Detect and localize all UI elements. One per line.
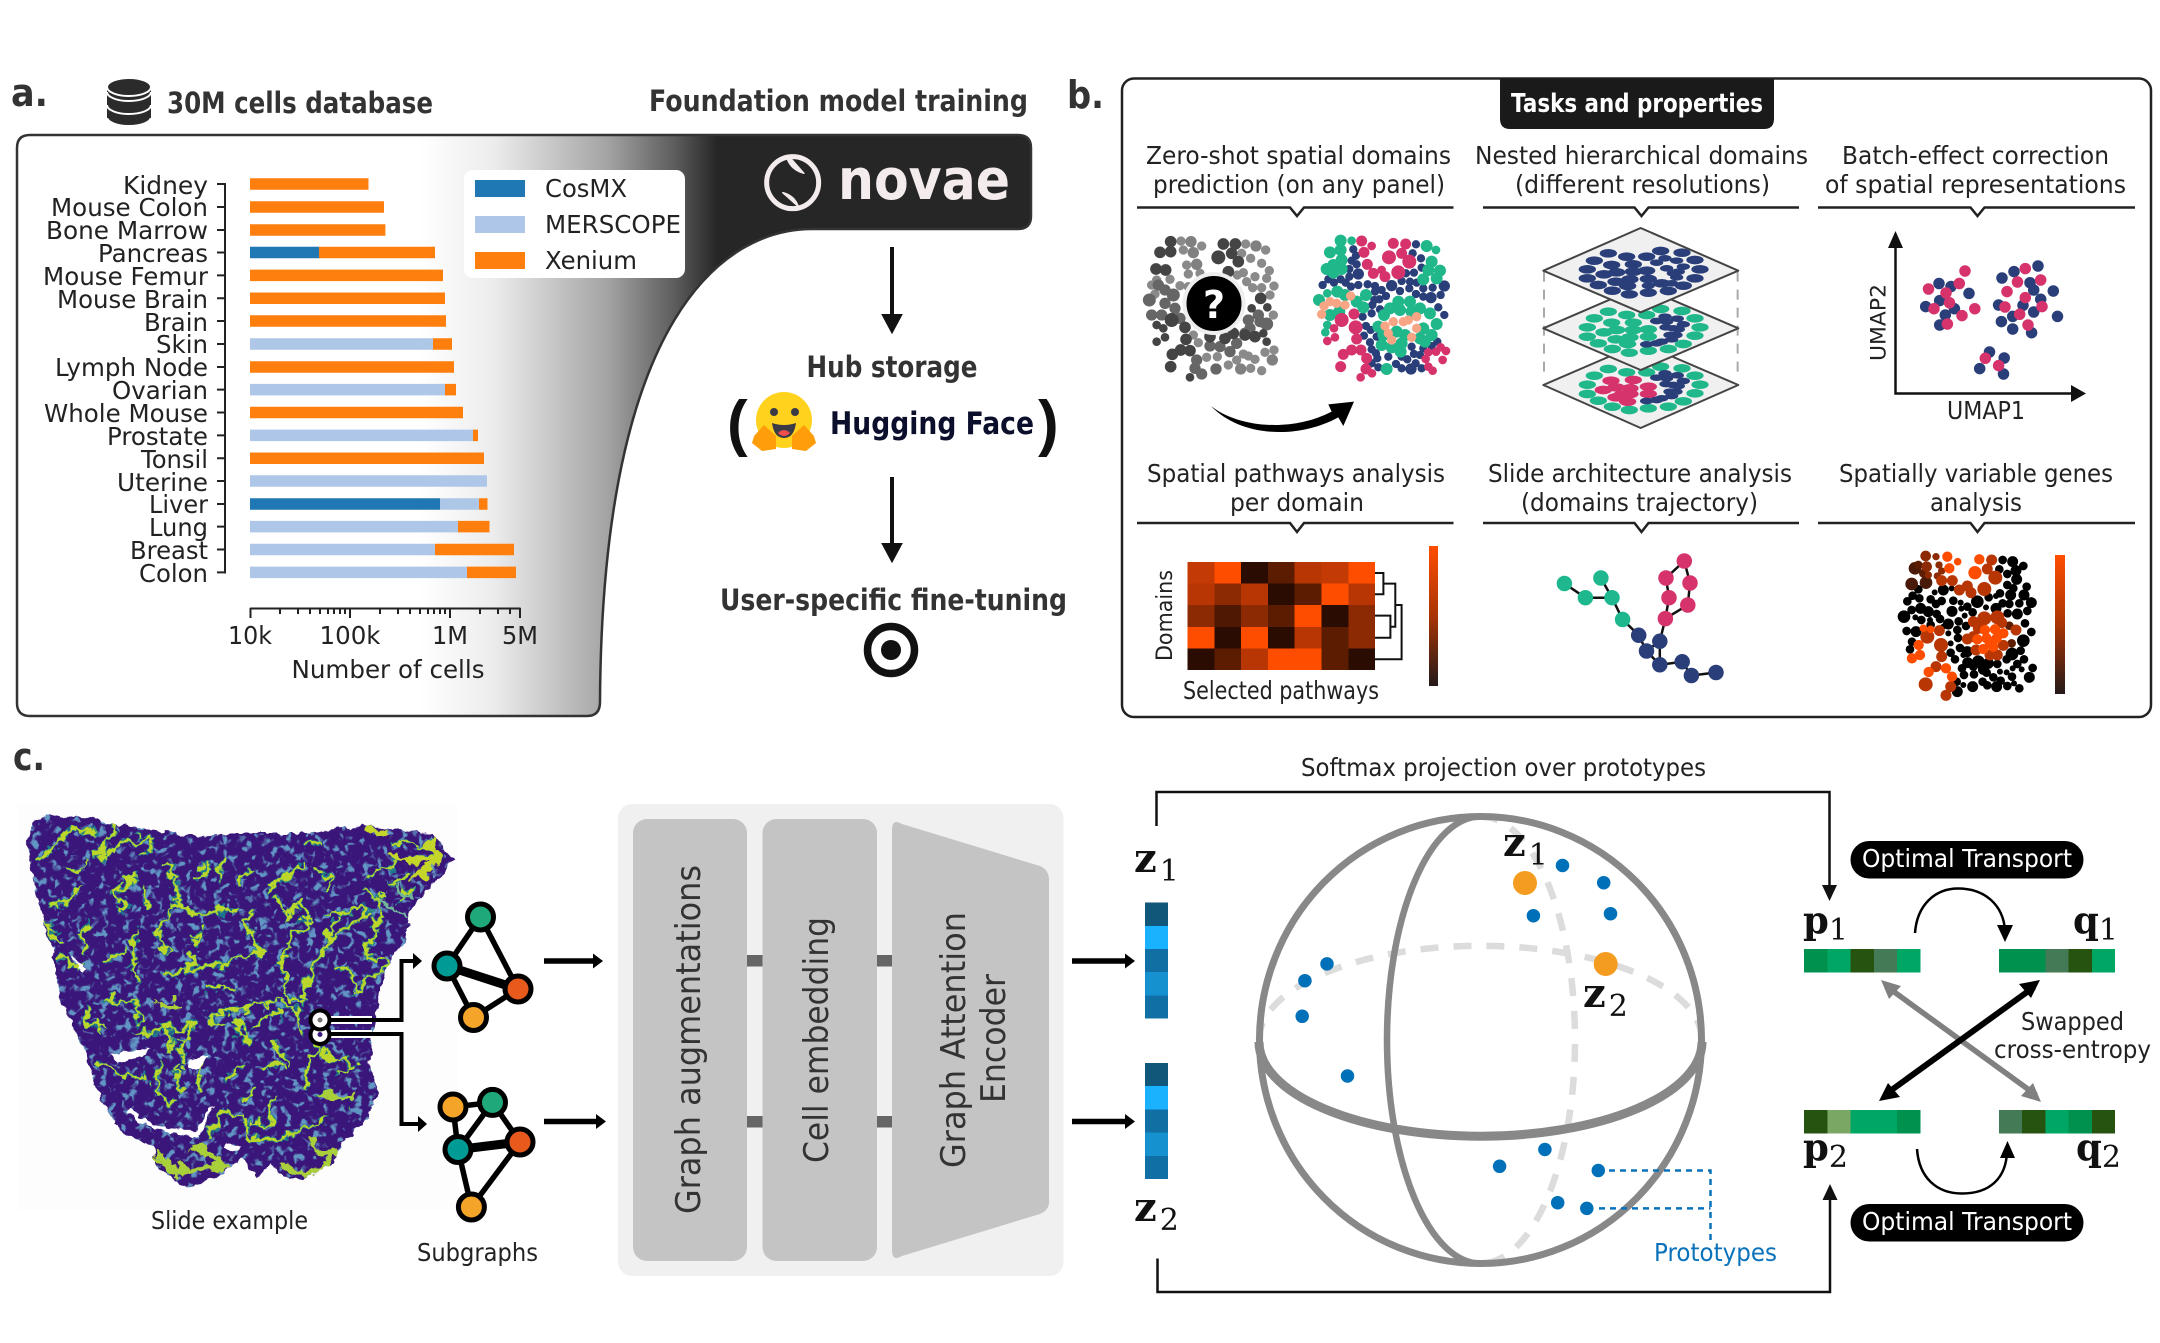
label swapped cross-entropy (1994, 1007, 2151, 1064)
tissue labels: Brain (144, 308, 208, 337)
task heading (1137, 459, 1454, 532)
block: cell embedding: Cell embedding (797, 917, 837, 1163)
domains label: Domains (1153, 570, 1178, 661)
icon: target (868, 626, 914, 674)
UMAP1 label: UMAP1 (1947, 396, 2025, 425)
curved arrow (1211, 402, 1354, 432)
label p1: p (1803, 898, 1829, 942)
task heading: Spatially variable genes (1839, 459, 2113, 488)
gene expression scatter (1904, 556, 2033, 695)
arrows: encoder to embeddings (1072, 961, 1128, 1122)
UMAP points (1926, 266, 2058, 374)
x tick labels (228, 621, 538, 650)
prototype leader lines (1599, 1170, 1710, 1241)
label z1: 1 (1160, 854, 1179, 889)
pill: optimal transport bottom: Optimal Transport (1862, 1207, 2072, 1236)
label p2: 2 (1829, 1140, 1848, 1175)
task: slide architecture (1483, 459, 1799, 676)
sphere outline (1259, 816, 1702, 1264)
task heading: Batch-effect correction (1842, 141, 2109, 170)
task heading: (domains trajectory) (1521, 488, 1758, 517)
label p2: p (1803, 1125, 1829, 1169)
label swapped cross-entropy: cross-entropy (1994, 1035, 2151, 1064)
icon: hugging face emoji (752, 392, 816, 451)
label q1: 1 (2099, 913, 2118, 948)
block: graph augmentations: Graph augmentations (669, 865, 709, 1214)
question mark badge: ? (1203, 283, 1225, 327)
block: graph attention encoder (892, 822, 1049, 1258)
softmax projection bracket top (1156, 792, 1837, 901)
x axis (250, 608, 520, 618)
connectors: slide to subgraphs (310, 953, 427, 1132)
hugging face brand: Hugging Face (830, 406, 1034, 442)
tissue labels: Colon (139, 559, 208, 588)
embedding vector z1 (1145, 903, 1168, 1019)
heading: fine-tuning: User-specific fine-tuning (720, 583, 1067, 617)
label z2: 2 (1160, 1203, 1179, 1238)
tissue labels: Bone Marrow (46, 216, 208, 245)
tissue labels: Whole Mouse (44, 399, 208, 428)
label q1: q (2073, 898, 2099, 942)
block: graph augmentations (633, 819, 747, 1261)
heading: foundation model: Foundation model training (649, 84, 1028, 118)
UMAP2 label: UMAP2 (1866, 284, 1890, 361)
task heading: (different resolutions) (1515, 170, 1770, 199)
tissue labels: Tonsil (140, 445, 208, 474)
sphere (1259, 816, 1710, 1264)
curved arrow top (1915, 888, 2013, 942)
novae logo: novae (838, 148, 1010, 213)
block connectors (747, 955, 892, 1128)
label z2: z (1134, 1184, 1157, 1231)
prototype points (1302, 866, 1610, 1208)
panel c label: c. (13, 735, 45, 779)
embedding vector z2 (1145, 1063, 1168, 1179)
label z1: z (1134, 835, 1157, 882)
y axis (217, 183, 225, 574)
hugging face brand: ) (1038, 389, 1059, 458)
softmax projection bracket bottom (1158, 1184, 1838, 1292)
task: nested domains (1475, 141, 1808, 428)
bottom layer (1543, 343, 1738, 428)
tissue labels: Pancreas (98, 239, 208, 268)
x tick labels: 5M (502, 621, 538, 650)
tissue labels: Prostate (107, 422, 208, 451)
panel b: title tab: Tasks and properties (1511, 89, 1763, 119)
x axis title: Number of cells (292, 655, 484, 684)
gray cell scatter (1149, 241, 1274, 377)
question mark badge (1184, 274, 1244, 333)
embedded points (1525, 883, 1606, 964)
tissue labels: Skin (156, 330, 208, 359)
black arrow (1879, 980, 2040, 1101)
tissue labels: Breast (130, 536, 208, 565)
colored domain scatter (1319, 241, 1446, 377)
tissue labels: Mouse Brain (57, 285, 208, 314)
label q2: 2 (2102, 1140, 2121, 1175)
subgraph 2 (440, 1089, 533, 1220)
x tick labels: 100k (320, 621, 381, 650)
panel b: title tab (1500, 79, 1774, 129)
task: zero-shot domains (1137, 141, 1454, 432)
task heading (1483, 459, 1799, 532)
curved arrow bottom (1917, 1141, 2015, 1194)
caption: slide example: Slide example (151, 1206, 308, 1235)
tissue labels (43, 171, 209, 588)
colorbar (1429, 546, 1438, 686)
task heading (1818, 459, 2135, 532)
panel a: gradient background (17, 135, 1031, 716)
dendrogram (1375, 573, 1402, 659)
legend: Xenium (545, 246, 637, 275)
tissue labels: Mouse Colon (51, 193, 208, 222)
prototype bar p1 (1804, 949, 1920, 972)
tissue labels: Ovarian (112, 376, 208, 405)
prototype bar q1 (1999, 949, 2115, 972)
tissue labels: Uterine (117, 468, 208, 497)
hugging face brand (727, 389, 1059, 458)
legend: CosMX (545, 174, 627, 203)
label swapped cross-entropy: Swapped (2021, 1007, 2124, 1036)
sphere label z1: z (1503, 819, 1526, 866)
label p1: 1 (1829, 913, 1848, 948)
arrow: hub to fine-tuning (884, 477, 900, 559)
heatmap (1188, 562, 1375, 670)
heading: softmax: Softmax projection over prototypes (1301, 753, 1706, 782)
task heading: Nested hierarchical domains (1475, 141, 1808, 170)
arrowheads: subgraphs to encoder (593, 954, 606, 1129)
legend: MERSCOPE (545, 210, 681, 239)
top layer (1543, 228, 1738, 312)
colorbar (2055, 555, 2065, 694)
x tick labels: 10k (228, 621, 272, 650)
panel b: frame (1122, 78, 2151, 717)
pathways label: Selected pathways (1183, 676, 1379, 705)
task heading: of spatial representations (1825, 170, 2126, 199)
bar chart: cells per tissue (43, 171, 538, 684)
icon: database (107, 78, 151, 126)
encoder module (618, 804, 1064, 1276)
task heading: per domain (1230, 488, 1364, 517)
trajectory graph (1564, 561, 1716, 676)
tissue labels: Liver (149, 490, 209, 519)
task heading (1818, 141, 2135, 216)
task: spatially variable genes (1818, 459, 2135, 695)
tissue labels: Lung (149, 513, 208, 542)
sphere label z1: 1 (1529, 838, 1548, 873)
legend (464, 170, 685, 278)
slide example image (26, 814, 456, 1188)
tissue labels: Mouse Femur (43, 262, 209, 291)
sphere label z2: z (1583, 970, 1606, 1017)
x tick labels: 1M (432, 621, 468, 650)
back dashed guides (1259, 816, 1702, 1264)
subgraph 1 (434, 904, 531, 1030)
task heading: Spatial pathways analysis (1147, 459, 1445, 488)
stacked layers (1543, 228, 1738, 428)
gray arrow (1881, 980, 2041, 1102)
task heading: Slide architecture analysis (1488, 459, 1792, 488)
block: graph attention encoder: Graph Attention (934, 912, 974, 1168)
block: cell embedding (762, 819, 877, 1261)
sphere label z2: 2 (1609, 989, 1628, 1024)
bars (250, 184, 516, 572)
arrows: subgraphs to encoder (544, 961, 599, 1122)
panel b label: b. (1067, 73, 1104, 117)
tissue labels: Kidney (123, 171, 208, 200)
middle layer (1543, 286, 1738, 370)
task heading (1137, 141, 1454, 216)
block: graph attention encoder: Encoder (974, 974, 1014, 1103)
heading: database: 30M cells database (167, 86, 433, 120)
task heading: prediction (on any panel) (1153, 170, 1445, 199)
logo mark (767, 157, 819, 209)
arrowheads: encoder to embeddings (1125, 954, 1135, 1129)
task heading: analysis (1930, 488, 2022, 517)
task heading: Zero-shot spatial domains (1146, 141, 1451, 170)
caption: subgraphs: Subgraphs (417, 1238, 538, 1267)
panel a label: a. (11, 71, 48, 115)
label q2: q (2076, 1125, 2102, 1169)
arrow: novae to hub (884, 247, 900, 330)
heading: hub storage: Hub storage (806, 350, 978, 384)
task heading (1475, 141, 1808, 216)
task: spatial pathways (1137, 459, 1454, 705)
tissue labels: Lymph Node (55, 353, 208, 382)
prototype bar q2 (1999, 1110, 2115, 1133)
pill: optimal transport top: Optimal Transport (1862, 844, 2072, 873)
crossed arrows (1879, 980, 2041, 1102)
task: batch-effect correction (1818, 141, 2135, 425)
prototype bar p2 (1804, 1110, 1920, 1133)
UMAP axes (1888, 231, 2086, 402)
prototypes label: Prototypes (1654, 1238, 1777, 1267)
hugging face brand: ( (727, 389, 748, 458)
novae logo (767, 148, 1010, 213)
